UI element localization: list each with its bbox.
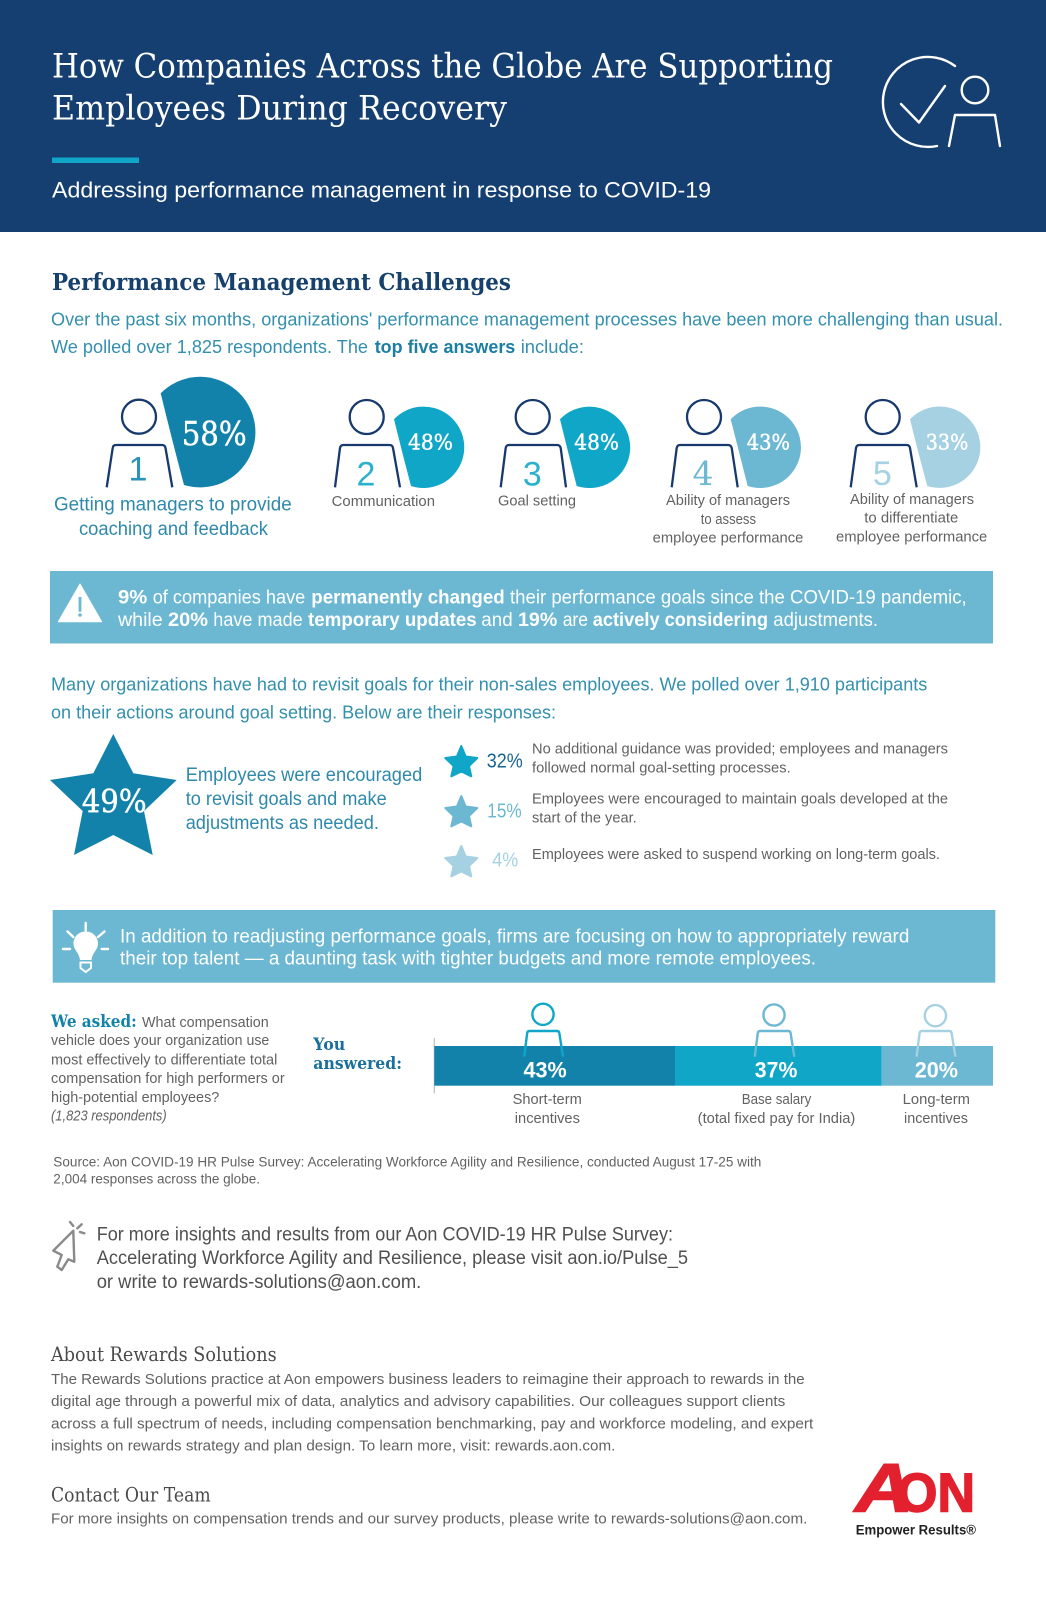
title: [52, 46, 833, 128]
response: 15%: 15%: [487, 799, 522, 822]
callout text: of companies have: [153, 587, 305, 608]
about rewards solutions: About Rewards Solutions: [50, 1343, 277, 1366]
label: employee performance: [653, 531, 803, 547]
challenge 2: communication 48%: 2: [357, 456, 375, 494]
challenge 1: coaching and feedback 58%: 58%: [182, 414, 247, 453]
challenge 3: goal setting 48%: 3: [523, 456, 542, 494]
label: [653, 493, 803, 547]
contact our team: Contact Our Team: [51, 1483, 211, 1506]
response: 15%: Employees were encouraged to maintain goals developed at the: [532, 792, 948, 808]
challenge 5: differentiate employee performance 33%: 5: [873, 455, 892, 493]
about rewards solutions: insights on rewards strategy and plan design. To learn more, visit: rewards.aon.com.: [51, 1437, 615, 1454]
label: Ability of managers: [850, 492, 974, 508]
icon: star: [445, 746, 477, 776]
response: 4%: [445, 846, 940, 876]
contact our team: [51, 1483, 807, 1528]
intro paragraph: top five answers: [375, 336, 515, 357]
label: Ability of managers: [666, 493, 790, 509]
callout: performance goal changes: [50, 571, 993, 644]
challenge 4: assess employee performance 43%: [653, 400, 803, 547]
callout text: their top talent — a daunting task with tighter budgets and more remote employees.: [120, 949, 816, 970]
survey question: (1,823 respondents): [51, 1108, 167, 1124]
response: 15%: [445, 792, 948, 827]
response: 4%: Employees were asked to suspend working on long-term goals.: [532, 847, 940, 863]
challenge 4: assess employee performance 43%: 4: [692, 454, 714, 493]
label: coaching and feedback: [79, 519, 268, 540]
challenge 2: communication 48%: 48%: [408, 430, 453, 455]
callout text: 19%: [518, 610, 557, 631]
callout: rewarding top talent: [53, 910, 995, 983]
source note: [53, 1154, 761, 1187]
big star: 49%: [50, 734, 177, 855]
survey question: high-potential employees?: [51, 1090, 219, 1106]
label: [836, 492, 987, 545]
segment: short-term incentives 43%: [434, 1004, 675, 1127]
paragraph: revisiting goals: [51, 674, 927, 722]
callout text: [120, 926, 909, 970]
logo: Aon Empower Results: ON: [897, 1462, 975, 1524]
about rewards solutions: digital age through a powerful mix of data, analytics and advisory capabilities. Our colleagues support clients: [51, 1393, 785, 1410]
callout text: while: [117, 610, 163, 631]
callout text: In addition to readjusting performance goals, firms are focusing on how to appropriately reward: [120, 926, 909, 947]
label: to differentiate: [864, 511, 958, 527]
label: employee performance: [836, 529, 987, 545]
source note: Source: Aon COVID-19 HR Pulse Survey: Accelerating Workforce Agility and Resilience, conducted August 17-25 with: [53, 1154, 761, 1170]
logo: Aon Empower Results: A: [853, 1450, 913, 1526]
text: employees encouraged to revisit goals: adjustments as needed.: [186, 813, 379, 834]
title: How Companies Across the Globe Are Supporting: [52, 46, 833, 86]
challenge 2: communication 48%: [332, 400, 464, 510]
big star: 49%: 49%: [82, 782, 147, 820]
text: employees encouraged to revisit goals: [186, 765, 422, 834]
callout text: their performance goals since the COVID-19 pandemic,: [510, 587, 967, 608]
heading: you answered: [312, 1035, 402, 1074]
intro paragraph: Over the past six months, organizations' performance management processes have been more challenging than usual.: [51, 309, 1003, 330]
challenge 5: differentiate employee performance 33%: 33%: [926, 430, 968, 455]
intro paragraph: We polled over 1,825 respondents. The: [51, 336, 368, 357]
segment: long-term incentives 20%: [882, 1005, 993, 1127]
about rewards solutions: The Rewards Solutions practice at Aon empowers business leaders to reimagine their approach to rewards in the: [51, 1371, 805, 1388]
callout text: and: [481, 610, 513, 631]
challenge 4: assess employee performance 43%: 43%: [747, 430, 790, 455]
label: Communication: [332, 494, 435, 510]
callout text: [117, 587, 967, 631]
text: employees encouraged to revisit goals: to revisit goals and make: [186, 789, 387, 810]
paragraph: revisiting goals: on their actions around goal setting. Below are their responses:: [51, 701, 556, 722]
callout text: actively considering: [593, 610, 768, 631]
response: 32%: [445, 741, 948, 776]
intro paragraph: [51, 309, 1003, 357]
paragraph: revisiting goals: Many organizations have had to revisit goals for their non-sales employees. We polled over 1,910 participants: [51, 674, 927, 695]
text: employees encouraged to revisit goals: Employees were encouraged: [186, 765, 422, 786]
text: more insights: For more insights and results from our Aon COVID-19 HR Pulse Survey:: [97, 1224, 673, 1245]
pie 48%: [394, 407, 464, 488]
pie 58%: [161, 377, 255, 487]
challenge 1: coaching and feedback 58%: 1: [129, 451, 147, 489]
challenge 3: goal setting 48%: 48%: [574, 430, 619, 455]
pie 43%: [731, 407, 801, 488]
heading: performance management challenges: Performance Management Challenges: [52, 269, 511, 296]
heading: you answered: answered:: [313, 1054, 402, 1074]
icon: light bulb: [63, 923, 108, 972]
segment: base salary 37%: [675, 1004, 882, 1127]
icon: person 2: [335, 400, 400, 487]
icon: person 1: [107, 400, 172, 487]
icon: person 5: [851, 400, 917, 487]
intro paragraph: include:: [521, 336, 584, 357]
logo: Aon Empower Results: [853, 1450, 976, 1537]
callout text: 9%: [118, 587, 147, 608]
segment: long-term incentives 20%: 20%: [915, 1058, 958, 1083]
callout text: are: [563, 610, 588, 631]
pie 48%: [560, 407, 630, 488]
contact our team: For more insights on compensation trends and our survey products, please write to rewards-solutions@aon.com.: [51, 1510, 807, 1528]
callout text: have made: [213, 610, 303, 631]
response: 32%: 32%: [487, 749, 523, 772]
about rewards solutions: across a full spectrum of needs, including compensation benchmarking, pay and workforce modeling, and expert: [51, 1415, 814, 1432]
about rewards solutions: [50, 1343, 814, 1454]
label: Getting managers to provide: [54, 495, 292, 516]
challenge 5: differentiate employee performance 33%: [836, 400, 987, 545]
survey question: most effectively to differentiate total: [51, 1052, 277, 1068]
subtitle: Addressing performance management in response to COVID-19: [52, 178, 711, 202]
segment: short-term incentives 43%: Short-term: [513, 1092, 582, 1108]
segment: base salary 37%: Base salary: [742, 1092, 812, 1108]
icon: person 4: [672, 400, 738, 487]
icon: cursor click: [53, 1222, 84, 1270]
segment: short-term incentives 43%: 43%: [524, 1058, 567, 1083]
survey question: compensation for high performers or: [51, 1071, 285, 1087]
survey question: vehicle does your organization use: [51, 1033, 269, 1049]
text: more insights: Accelerating Workforce Agility and Resilience, please visit aon.io/Pulse_5: [97, 1248, 688, 1269]
text: more insights: or write to rewards-solutions@aon.com.: [97, 1272, 421, 1293]
segment: long-term incentives 20%: Long-term: [903, 1092, 970, 1108]
label: Goal setting: [498, 494, 576, 510]
segment: base salary 37%: (total fixed pay for India): [698, 1111, 855, 1127]
response: 32%: followed normal goal-setting processes.: [532, 760, 791, 776]
accent rule: [52, 158, 139, 163]
response: 32%: No additional guidance was provided; employees and managers: [532, 741, 948, 757]
icon: warning triangle: [58, 584, 102, 622]
icon: checkmark and person: [883, 57, 1000, 147]
icon: star: [445, 796, 477, 826]
challenge 3: goal setting 48%: [498, 400, 630, 510]
segment: short-term incentives 43%: incentives: [515, 1111, 580, 1127]
callout text: permanently changed: [311, 587, 505, 608]
stacked bar chart: compensation vehicles: [434, 1004, 993, 1127]
title: Employees During Recovery: [52, 89, 507, 128]
callout text: 20%: [168, 610, 208, 631]
pie 33%: [910, 407, 980, 488]
text: more insights: [97, 1224, 688, 1293]
callout text: adjustments.: [773, 610, 878, 631]
challenge 1: coaching and feedback 58%: [54, 377, 292, 540]
survey question: [50, 1012, 285, 1124]
heading: you answered: You: [312, 1035, 345, 1055]
icon: star: [445, 846, 477, 876]
survey question: We asked:: [50, 1012, 137, 1032]
header banner: [0, 0, 1046, 232]
survey question: What compensation: [142, 1015, 269, 1031]
label: [54, 495, 292, 540]
label: to assess: [701, 512, 756, 528]
response: 15%: start of the year.: [532, 811, 637, 827]
logo: Aon Empower Results: Empower Results®: [856, 1522, 976, 1537]
callout text: temporary updates: [308, 610, 477, 631]
icon: person 3: [501, 400, 566, 487]
source note: 2,004 responses across the globe.: [53, 1172, 260, 1187]
segment: base salary 37%: 37%: [755, 1058, 797, 1083]
segment: long-term incentives 20%: incentives: [904, 1111, 968, 1127]
response: 4%: 4%: [492, 849, 518, 872]
